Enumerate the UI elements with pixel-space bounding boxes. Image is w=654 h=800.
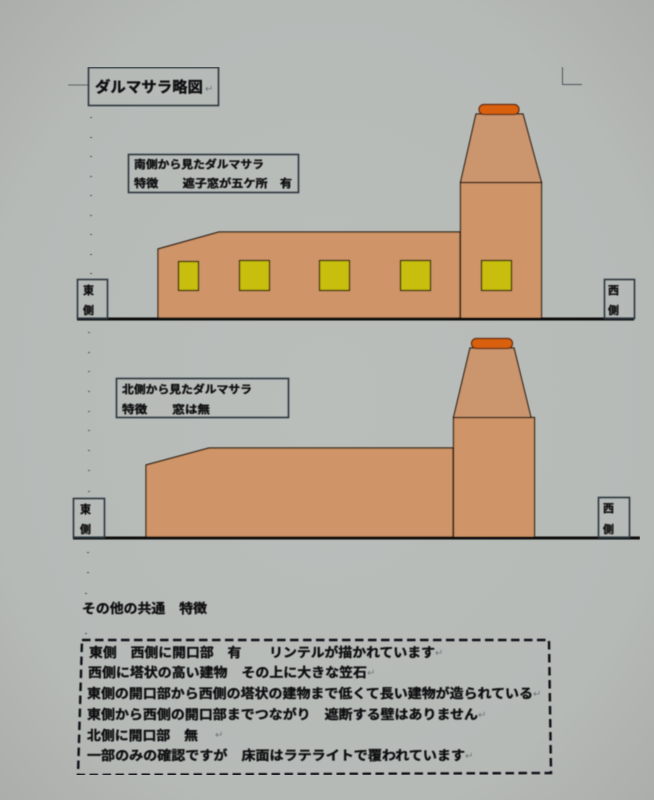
title box <box>68 68 218 106</box>
window 5 <box>482 260 512 290</box>
north east label: 側 <box>80 523 91 536</box>
features text: 東側の開口部から西側の塔状の建物まで低くて長い建物が造られている <box>87 686 533 701</box>
features text: 東側 西側に開口部 有 リンテルが描かれています <box>89 645 435 660</box>
south view caption: 南側から見たダルマサラ <box>134 157 264 171</box>
window 2 <box>240 260 270 290</box>
features text: ↵ <box>435 648 443 659</box>
long low building south <box>158 232 460 318</box>
south view caption <box>128 154 298 192</box>
features text: 北側に開口部 無 <box>87 728 198 743</box>
page corner mark <box>562 67 582 84</box>
margin ticks <box>85 117 92 634</box>
dashed features box <box>78 640 551 775</box>
south view caption: 特徴 遮子窓が五ケ所 有 <box>134 176 292 190</box>
window 1 <box>178 262 198 290</box>
north ground line <box>73 536 640 540</box>
long low building north <box>146 448 453 537</box>
title box: ↵ <box>205 84 213 95</box>
tower top south <box>460 114 542 182</box>
features text: ↵ <box>465 751 473 762</box>
north view caption: 特徴 窓は無 <box>122 402 210 416</box>
tower top north <box>454 348 531 418</box>
south west label <box>604 280 634 318</box>
south east label: 側 <box>83 304 94 317</box>
north west label: 側 <box>603 523 614 536</box>
south west label: 側 <box>608 304 619 317</box>
south east label <box>78 280 108 318</box>
north west label <box>598 498 630 538</box>
south east label: 東 <box>83 283 94 297</box>
south ground line <box>77 318 634 320</box>
south west label: 西 <box>608 284 619 297</box>
capstone north <box>472 338 512 348</box>
capstone south <box>479 104 519 114</box>
tower body north <box>454 418 534 538</box>
north view caption: 北側から見たダルマサラ <box>122 382 252 396</box>
north east label <box>74 498 104 538</box>
features text: ↵ <box>478 710 486 721</box>
features text: ↵ <box>215 730 223 741</box>
features text: ↵ <box>533 689 541 700</box>
title box: ダルマサラ略図 <box>95 78 203 96</box>
south elevation building <box>158 104 542 318</box>
features text: 東側から西側の開口部までつながり 遮断する壁はありません <box>87 707 478 722</box>
common features heading: その他の共通 特徴 <box>82 601 207 616</box>
north elevation building <box>146 338 534 538</box>
north view caption <box>116 378 288 418</box>
features text <box>87 645 541 763</box>
north east label: 東 <box>80 502 91 516</box>
north west label: 西 <box>603 502 614 515</box>
tower body south <box>460 182 542 318</box>
features text: 一部のみの確認ですが 床面はラテライトで覆われています <box>87 748 465 763</box>
window 4 <box>400 260 430 290</box>
window 3 <box>320 260 350 290</box>
features text: ↵ <box>367 668 375 679</box>
features text: 西側に塔状の高い建物 その上に大きな笠石 <box>88 665 367 680</box>
